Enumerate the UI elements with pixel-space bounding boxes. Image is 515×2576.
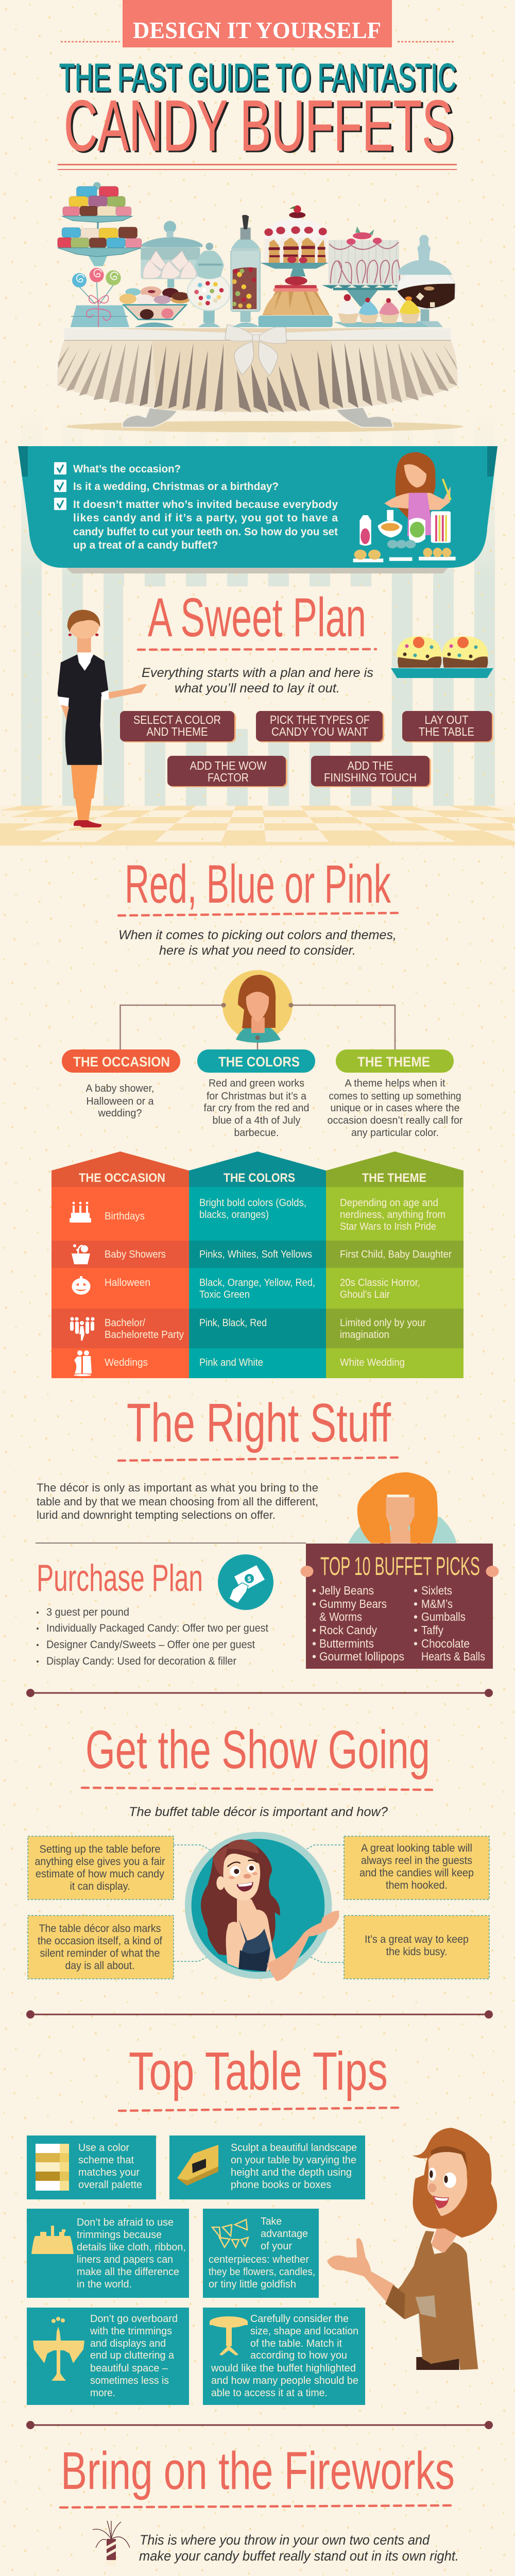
card: top 10 buffet picks: Chocolate [421, 1637, 470, 1650]
dashed connectors [174, 1845, 344, 1962]
icon: skirted table [31, 2226, 74, 2254]
tip: overboard: beautiful space – [90, 2363, 168, 2374]
tip: trimmings: details like cloth, ribbon, [77, 2242, 186, 2253]
icon: hand with money [218, 1554, 273, 1610]
column: occasion: Bachelorette Party [105, 1329, 184, 1341]
tall candy jar [241, 312, 251, 322]
pill descriptions: occasion doesn’t really call for [328, 1115, 463, 1126]
white cake [329, 240, 399, 285]
step buttons: ADD THE [347, 759, 393, 772]
intro text: make your candy buffet really stand out in its own right. [139, 2548, 459, 2564]
small candy jar [203, 308, 215, 323]
lollipops and gift [79, 282, 113, 304]
tip: centerpieces: advantage [261, 2228, 308, 2240]
pill descriptions: wedding? [98, 1108, 142, 1119]
tip: trimmings: make all the difference [77, 2266, 179, 2278]
subtitle: The buffet table décor is important and how? [129, 1805, 388, 1819]
step buttons: SELECT A COLOR [133, 713, 221, 726]
card: top 10 buffet picks: & Worms [319, 1610, 362, 1623]
pill descriptions: blue of a 4th of July [212, 1115, 301, 1126]
purchase list: Designer Candy/Sweets – Offer one per guest [46, 1639, 255, 1651]
woman with candy jars [353, 452, 456, 562]
intro paragraph [37, 1481, 318, 1521]
step buttons: LAY OUT [424, 713, 469, 726]
icon: firecracker [93, 2521, 130, 2566]
column: theme: Star Wars to Irish Pride [340, 1221, 436, 1232]
tip: overboard: Don’t go overboard [90, 2313, 178, 2325]
icon: wedding couple [74, 1350, 92, 1376]
section: A Sweet Plan [58, 586, 493, 827]
intro text: This is where you throw in your own two cents and [140, 2532, 430, 2548]
step buttons [120, 711, 493, 787]
column: theme: Depending on age and [340, 1197, 438, 1209]
redhead woman [348, 1472, 457, 1544]
intro paragraph: table and by that we mean choosing from all the different, [37, 1495, 318, 1508]
card: top 10 buffet picks: Sixlets [421, 1584, 452, 1597]
column: theme: White Wedding [340, 1357, 405, 1368]
tip: sculpt landscape: on your table by varying the [231, 2155, 356, 2166]
box: table decor occasion: The table décor also marks [39, 1923, 161, 1935]
pill descriptions: any particular color. [351, 1127, 439, 1139]
step buttons: ADD THE WOW [190, 759, 267, 772]
column: theme: imagination [340, 1329, 389, 1341]
heading: The Right Stuff [127, 1393, 391, 1453]
column: occasion: Baby Showers [105, 1249, 166, 1260]
icon: hand with money: $ [247, 1575, 251, 1583]
card: top 10 buffet picks: • [414, 1623, 418, 1637]
tip: centerpieces [203, 2209, 319, 2298]
icon: phone book [177, 2145, 218, 2185]
tip: color scheme: Use a color [78, 2142, 129, 2154]
meringue jar [164, 221, 176, 233]
tip: overboard: end up cluttering a [90, 2350, 175, 2361]
column: occasion [52, 1151, 189, 1378]
section: Bring on the Fireworks [21, 2441, 497, 2576]
cupcakes on shelf [391, 636, 493, 678]
tip: overboard: with the trimmings [90, 2326, 172, 2337]
card: top 10 buffet picks: Hearts & Balls [421, 1650, 485, 1663]
purchase list [37, 1606, 268, 1667]
box: great looking table: A great looking table will [361, 1842, 472, 1854]
tip: trimmings [27, 2209, 189, 2298]
checklist: Is it a wedding, Christmas or a birthday? [73, 481, 279, 493]
pill descriptions: comes to setting up something [329, 1091, 461, 1102]
icon: bunting [212, 2219, 248, 2247]
illustration: woman gesturing [327, 2128, 497, 2370]
checklist: up a treat of a candy buffet? [73, 539, 218, 551]
card: top 10 buffet picks: • [414, 1610, 418, 1623]
table skirt and legs [57, 325, 458, 427]
pill descriptions: A baby shower, [85, 1083, 154, 1094]
purchase list: Display Candy: Used for decoration & filler [46, 1655, 236, 1667]
title [59, 56, 458, 167]
legs and shoe [74, 799, 101, 827]
cupcakes [334, 322, 429, 327]
tip: centerpieces: or tiny little goldfish [209, 2279, 296, 2290]
box: great looking table: and the candies will keep [359, 1867, 474, 1879]
tip: overboard: more. [90, 2387, 115, 2399]
checkered floor [0, 806, 515, 845]
intro text: When it comes to picking out colors and themes, [118, 928, 397, 942]
section: Top Table Tips [27, 2041, 497, 2405]
tip: table size: would like the buffet highlighted [211, 2363, 356, 2374]
tip: trimmings: trimmings because [77, 2229, 162, 2241]
column: occasion: Bachelor/ [105, 1317, 145, 1329]
card: top 10 buffet picks [301, 1544, 499, 1669]
card: top 10 buffet picks: Buttermints [319, 1637, 374, 1650]
tip: table size: Carefully consider the [250, 2313, 349, 2325]
pill: The Occasion [62, 1049, 180, 1073]
section: Red, Blue or Pink [52, 854, 464, 1378]
box: setting up [28, 1836, 174, 1900]
card: top 10 buffet picks: • [312, 1584, 316, 1597]
column: colors: Pink and White [199, 1357, 263, 1368]
column: colors: Toxic Green [199, 1289, 250, 1300]
column: colors: Pink, Black, Red [199, 1317, 267, 1329]
intro paragraph: The décor is only as important as what you bring to the [37, 1481, 318, 1494]
tip: table size: size, shape and location [250, 2326, 358, 2337]
intro text [142, 666, 373, 696]
box: kids busy: It’s a great way to keep [365, 1934, 469, 1945]
step buttons: FACTOR [208, 771, 249, 784]
column: colors: THE COLORS [224, 1171, 295, 1185]
intro text [118, 928, 397, 958]
column: occasion: THE OCCASION [79, 1171, 165, 1185]
box: kids busy [344, 1916, 489, 1979]
tip: color scheme: scheme that [78, 2155, 134, 2166]
icon: birthday cake [70, 1201, 91, 1223]
card: top 10 buffet picks: • [312, 1650, 316, 1663]
column: colors: Pinks, Whites, Soft Yellows [199, 1249, 312, 1260]
column: occasion: Birthdays [105, 1211, 145, 1222]
pastry bowl [125, 288, 141, 296]
jars [359, 515, 371, 546]
pill: The Colors: THE COLORS [218, 1054, 300, 1070]
tip: table size: able to access it at a time. [211, 2387, 328, 2399]
card: top 10 buffet picks: M&M’s [421, 1597, 453, 1611]
pill descriptions: Red and green works [209, 1078, 304, 1089]
floor shadow [66, 421, 464, 432]
card: top 10 buffet picks: • [312, 1623, 316, 1637]
card: top 10 buffet picks: Gourmet lollipops [319, 1650, 404, 1663]
pill: The Theme [336, 1049, 454, 1073]
pill: The Theme: THE THEME [357, 1054, 430, 1070]
column: colors: Black, Orange, Yellow, Red, [199, 1277, 315, 1289]
pill descriptions: far cry from the red and [204, 1103, 309, 1114]
connector lines [121, 1005, 395, 1049]
pill descriptions: A theme helps when it [345, 1078, 445, 1089]
tip: overboard: sometimes less is [90, 2375, 169, 2386]
purchase plan heading: Purchase Plan [37, 1557, 203, 1599]
woman presenter [58, 610, 147, 799]
section: The Right Stuff [36, 1393, 499, 1669]
purchase list: 3 guest per pound [46, 1606, 129, 1618]
teal intro banner [18, 446, 497, 573]
box: table decor occasion: day is all about. [65, 1960, 135, 1972]
pill descriptions: Halloween or a [87, 1096, 154, 1107]
step buttons: THE TABLE [419, 725, 474, 738]
column: theme: nerdiness, anything from [340, 1209, 445, 1221]
tip: centerpieces: they be flowers, candles, [209, 2266, 315, 2278]
box: table decor occasion: the occasion itself, a kind of [38, 1935, 162, 1947]
icon: table with vase [33, 2317, 84, 2381]
icon: dancing party [70, 1317, 95, 1341]
table top [64, 328, 451, 341]
tip: sculpt landscape [169, 2136, 365, 2199]
box: table decor occasion [28, 1916, 174, 1979]
column: theme: Limited only by your [340, 1317, 426, 1329]
top banner: Design It Yourself [123, 0, 392, 47]
intro paragraph: lurid and downright tempting selections on offer. [37, 1509, 276, 1521]
card: top 10 buffet picks: • [312, 1597, 316, 1611]
step buttons: CANDY YOU WANT [271, 725, 368, 738]
tip: trimmings: Don’t be afraid to use [77, 2217, 174, 2228]
checklist: likes candy and if it’s a party, you got to have a [73, 512, 338, 524]
step buttons: PICK THE TYPES OF [270, 713, 370, 726]
column: theme: Ghoul’s Lair [340, 1289, 390, 1300]
tip: overboard: and displays and [90, 2338, 166, 2349]
intro text: Everything starts with a plan and here is [142, 666, 373, 680]
tip: centerpieces: centerpieces: whether [209, 2254, 309, 2265]
column: theme: THE THEME [362, 1171, 426, 1185]
cakes, cupcakes, big jar [259, 206, 456, 327]
tip: color scheme [27, 2136, 156, 2199]
bow [225, 325, 287, 376]
step buttons: FINISHING TOUCH [324, 771, 417, 784]
pill descriptions: barbecue. [234, 1127, 279, 1139]
banner shadow [64, 566, 450, 573]
tip: color scheme: matches your [78, 2167, 140, 2178]
card: top 10 buffet picks: Jelly Beans [319, 1584, 374, 1597]
comparison table [52, 1151, 464, 1378]
column: theme: First Child, Baby Daughter [340, 1249, 452, 1260]
column: colors [189, 1151, 326, 1378]
column: occasion: Weddings [105, 1357, 148, 1368]
intro text [139, 2532, 459, 2564]
purchase list: Individually Packaged Candy: Offer two per guest [46, 1622, 268, 1634]
intro text: here is what you need to consider. [159, 943, 356, 958]
column: occasion: Halloween [105, 1277, 150, 1289]
illustration: smiling girl in circle [185, 1832, 339, 1981]
tip: color scheme: overall palette [78, 2179, 142, 2191]
card: top 10 buffet picks: Taffy [421, 1623, 443, 1637]
tip: trimmings: liners and papers can [77, 2254, 173, 2265]
checklist: candy buffet to cut your teeth on. So how do you set [73, 526, 338, 538]
tip: centerpieces: of your [261, 2241, 292, 2252]
tip: table size [203, 2308, 365, 2405]
pill descriptions [85, 1078, 463, 1139]
big jar [421, 308, 429, 322]
box: great looking table: them hooked. [386, 1879, 448, 1891]
box: setting up: it can display. [70, 1880, 130, 1892]
tip: overboard [27, 2308, 189, 2405]
illustration: candy buffet table [57, 182, 464, 432]
checklist [54, 462, 338, 551]
box: table decor occasion: silent reminder of what the [40, 1947, 160, 1959]
column: theme [326, 1151, 464, 1378]
card: top 10 buffet picks: • [414, 1584, 418, 1597]
box: kids busy: the kids busy. [386, 1946, 447, 1958]
icon: baby bath [72, 1244, 90, 1264]
pill: The Occasion: THE OCCASION [73, 1054, 170, 1070]
step buttons: AND THEME [146, 725, 208, 738]
icon: pumpkin [72, 1276, 91, 1295]
pudding [259, 316, 333, 327]
tip: table size: according to how you [250, 2350, 347, 2361]
section: Get the Show Going [28, 1720, 489, 1981]
card: top 10 buffet picks: • [414, 1637, 418, 1650]
card: top 10 buffet picks: Gumballs [421, 1610, 466, 1623]
portrait [221, 970, 294, 1043]
column: theme: 20s Classic Horror, [340, 1277, 420, 1289]
intro text: what you’ll need to lay it out. [175, 681, 340, 696]
icon: round table [210, 2316, 248, 2355]
strawberry cake [290, 269, 305, 277]
tip: trimmings: in the world. [77, 2279, 132, 2290]
column: colors: Bright bold colors (Golds, [199, 1197, 306, 1209]
box: setting up: anything else gives you a fair [35, 1856, 165, 1868]
tip: table size: of the table. Match it [250, 2338, 342, 2349]
tip: sculpt landscape: phone books or boxes [231, 2179, 331, 2191]
icon: swatches [36, 2144, 69, 2191]
checklist: What’s the occasion? [73, 463, 181, 475]
macaron stand, lollipops, meringue jar, bowl, candy jars [58, 182, 260, 327]
box: great looking table: always reel in the guests [361, 1855, 472, 1867]
heading: Top Table Tips [129, 2041, 388, 2102]
pill descriptions: for Christmas but it’s a [207, 1091, 307, 1102]
pill: The Colors [197, 1049, 315, 1073]
card: top 10 buffet picks: • [312, 1637, 316, 1650]
tip: table size: and how many people should be [211, 2375, 358, 2386]
box: great looking table [344, 1836, 489, 1900]
checklist: It doesn’t matter who’s invited because everybody [73, 499, 338, 511]
box: setting up: Setting up the table before [39, 1843, 161, 1855]
column: colors: blacks, oranges) [199, 1209, 269, 1221]
tip: sculpt landscape: height and the depth using [231, 2167, 352, 2178]
card: top 10 buffet picks: Gummy Bears [319, 1597, 387, 1611]
top banner: Design It Yourself: DESIGN IT YOURSELF [133, 17, 381, 43]
tip: centerpieces: Take [261, 2216, 282, 2227]
card: top 10 buffet picks: Rock Candy [319, 1623, 377, 1637]
box: setting up: estimate of how much candy [36, 1868, 164, 1880]
tip: sculpt landscape: Sculpt a beautiful landscape [231, 2142, 357, 2154]
pill descriptions: unique or in cases where the [331, 1103, 459, 1114]
card: top 10 buffet picks: • [414, 1597, 418, 1611]
heading: A Sweet Plan [148, 586, 366, 648]
